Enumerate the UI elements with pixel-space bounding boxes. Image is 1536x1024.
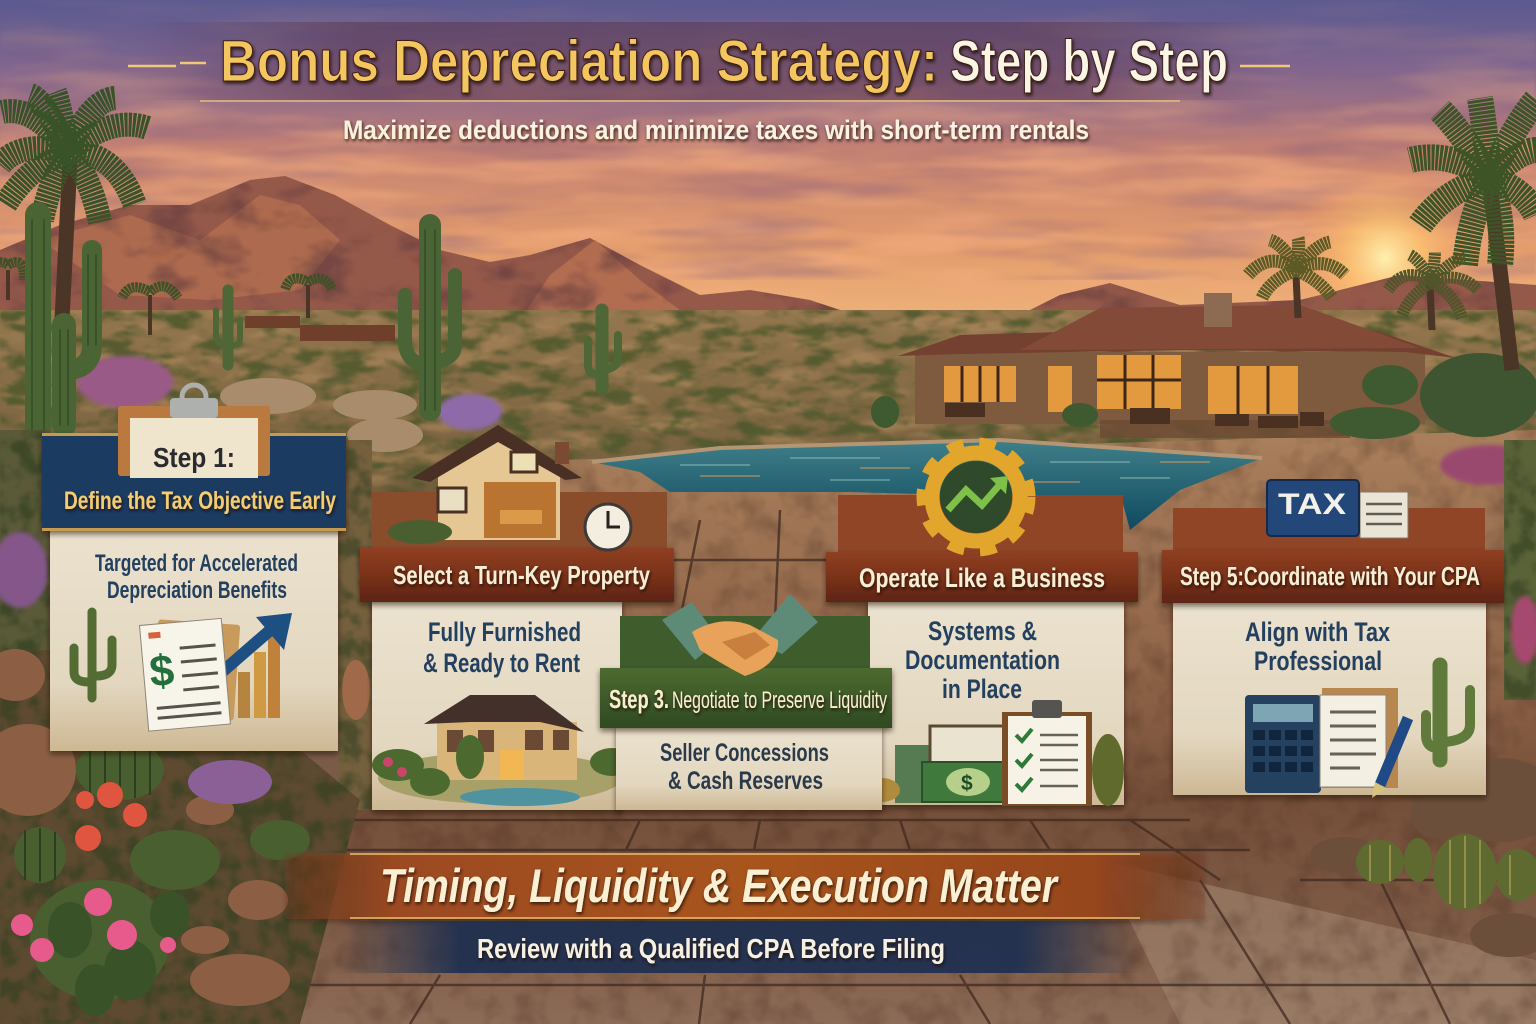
step 1 body text: Depreciation Benefits (107, 577, 287, 604)
icon: document with dollar and growth arrow: $ (148, 646, 176, 697)
icon: calculator, papers and pen (1245, 665, 1470, 798)
step 1 label: Step 1: (153, 442, 235, 473)
banner: key takeaway (285, 853, 1205, 919)
step 3 heading continued: Negotiate to Preserve Liquidity (672, 687, 887, 714)
title highlight: Step by Step (950, 29, 1228, 94)
step 4 heading: Operate Like a Business (859, 563, 1105, 593)
scene: saguaro cacti (32, 215, 618, 430)
step 5 body text: Align with Tax (1245, 617, 1390, 647)
step 3 body text: Seller Concessions (660, 739, 829, 767)
icon: furnished house with clock (388, 425, 631, 550)
callout text: Review with a Qualified CPA Before Filing (477, 933, 945, 964)
step 4 body text: Systems & (928, 616, 1037, 646)
step 2 heading: Select a Turn-Key Property (393, 560, 650, 590)
step 2 body text: & Ready to Rent (423, 648, 580, 678)
scene: swimming pool (592, 440, 1262, 530)
subtitle: Maximize deductions and minimize taxes with short-term rentals (343, 115, 1089, 145)
step 2 body text: Fully Furnished (428, 617, 581, 647)
step 5 body text: Professional (1254, 646, 1382, 676)
step 3 heading: Step 3. (609, 684, 669, 714)
panel: step 5 (1162, 480, 1504, 798)
step 1 body text (95, 550, 298, 604)
step 4 body text: Documentation (905, 645, 1060, 675)
step 4 body text: in Place (942, 674, 1022, 704)
step 3 body text: & Cash Reserves (668, 767, 823, 795)
icon: tax document (1267, 480, 1408, 538)
background: stone paving (300, 430, 1536, 1024)
step 1 body text: Targeted for Accelerated (95, 550, 298, 577)
step 5 body text (1245, 617, 1390, 676)
icon: gold gear with chart (923, 444, 1029, 550)
scene: palm trees (0, 92, 1536, 370)
panel: step 3 (600, 594, 892, 810)
panel: step 4 (826, 444, 1138, 806)
title text: Bonus Depreciation Strategy: (220, 29, 938, 94)
icon: cash and checklist: $ (961, 772, 973, 795)
background: mountains (0, 176, 1536, 310)
icon: tax document: TAX (1278, 488, 1346, 521)
step 2 body text (423, 617, 581, 678)
scene: resort house (871, 293, 1536, 485)
icon: handshake (662, 594, 818, 676)
scene: left desert garden (0, 430, 372, 1024)
panel: step 1 (42, 385, 346, 751)
panel: step 2 (360, 425, 674, 810)
step 3 body text (660, 739, 829, 795)
background: desert sky (0, 0, 1536, 353)
illustration: vacation home (372, 695, 634, 806)
step 1 heading: Define the Tax Objective Early (64, 487, 336, 515)
step 4 body text (905, 616, 1060, 704)
header: title band (128, 22, 1290, 102)
icon: clipboard tab (118, 385, 270, 478)
icon: cash and checklist (864, 700, 1124, 806)
background: desert floor (0, 310, 1536, 520)
icon: document with dollar and growth arrow (74, 612, 292, 731)
scene: right desert garden (1310, 440, 1536, 957)
banner text: Timing, Liquidity & Execution Matter (380, 859, 1059, 912)
callout: CPA review (340, 921, 1140, 973)
